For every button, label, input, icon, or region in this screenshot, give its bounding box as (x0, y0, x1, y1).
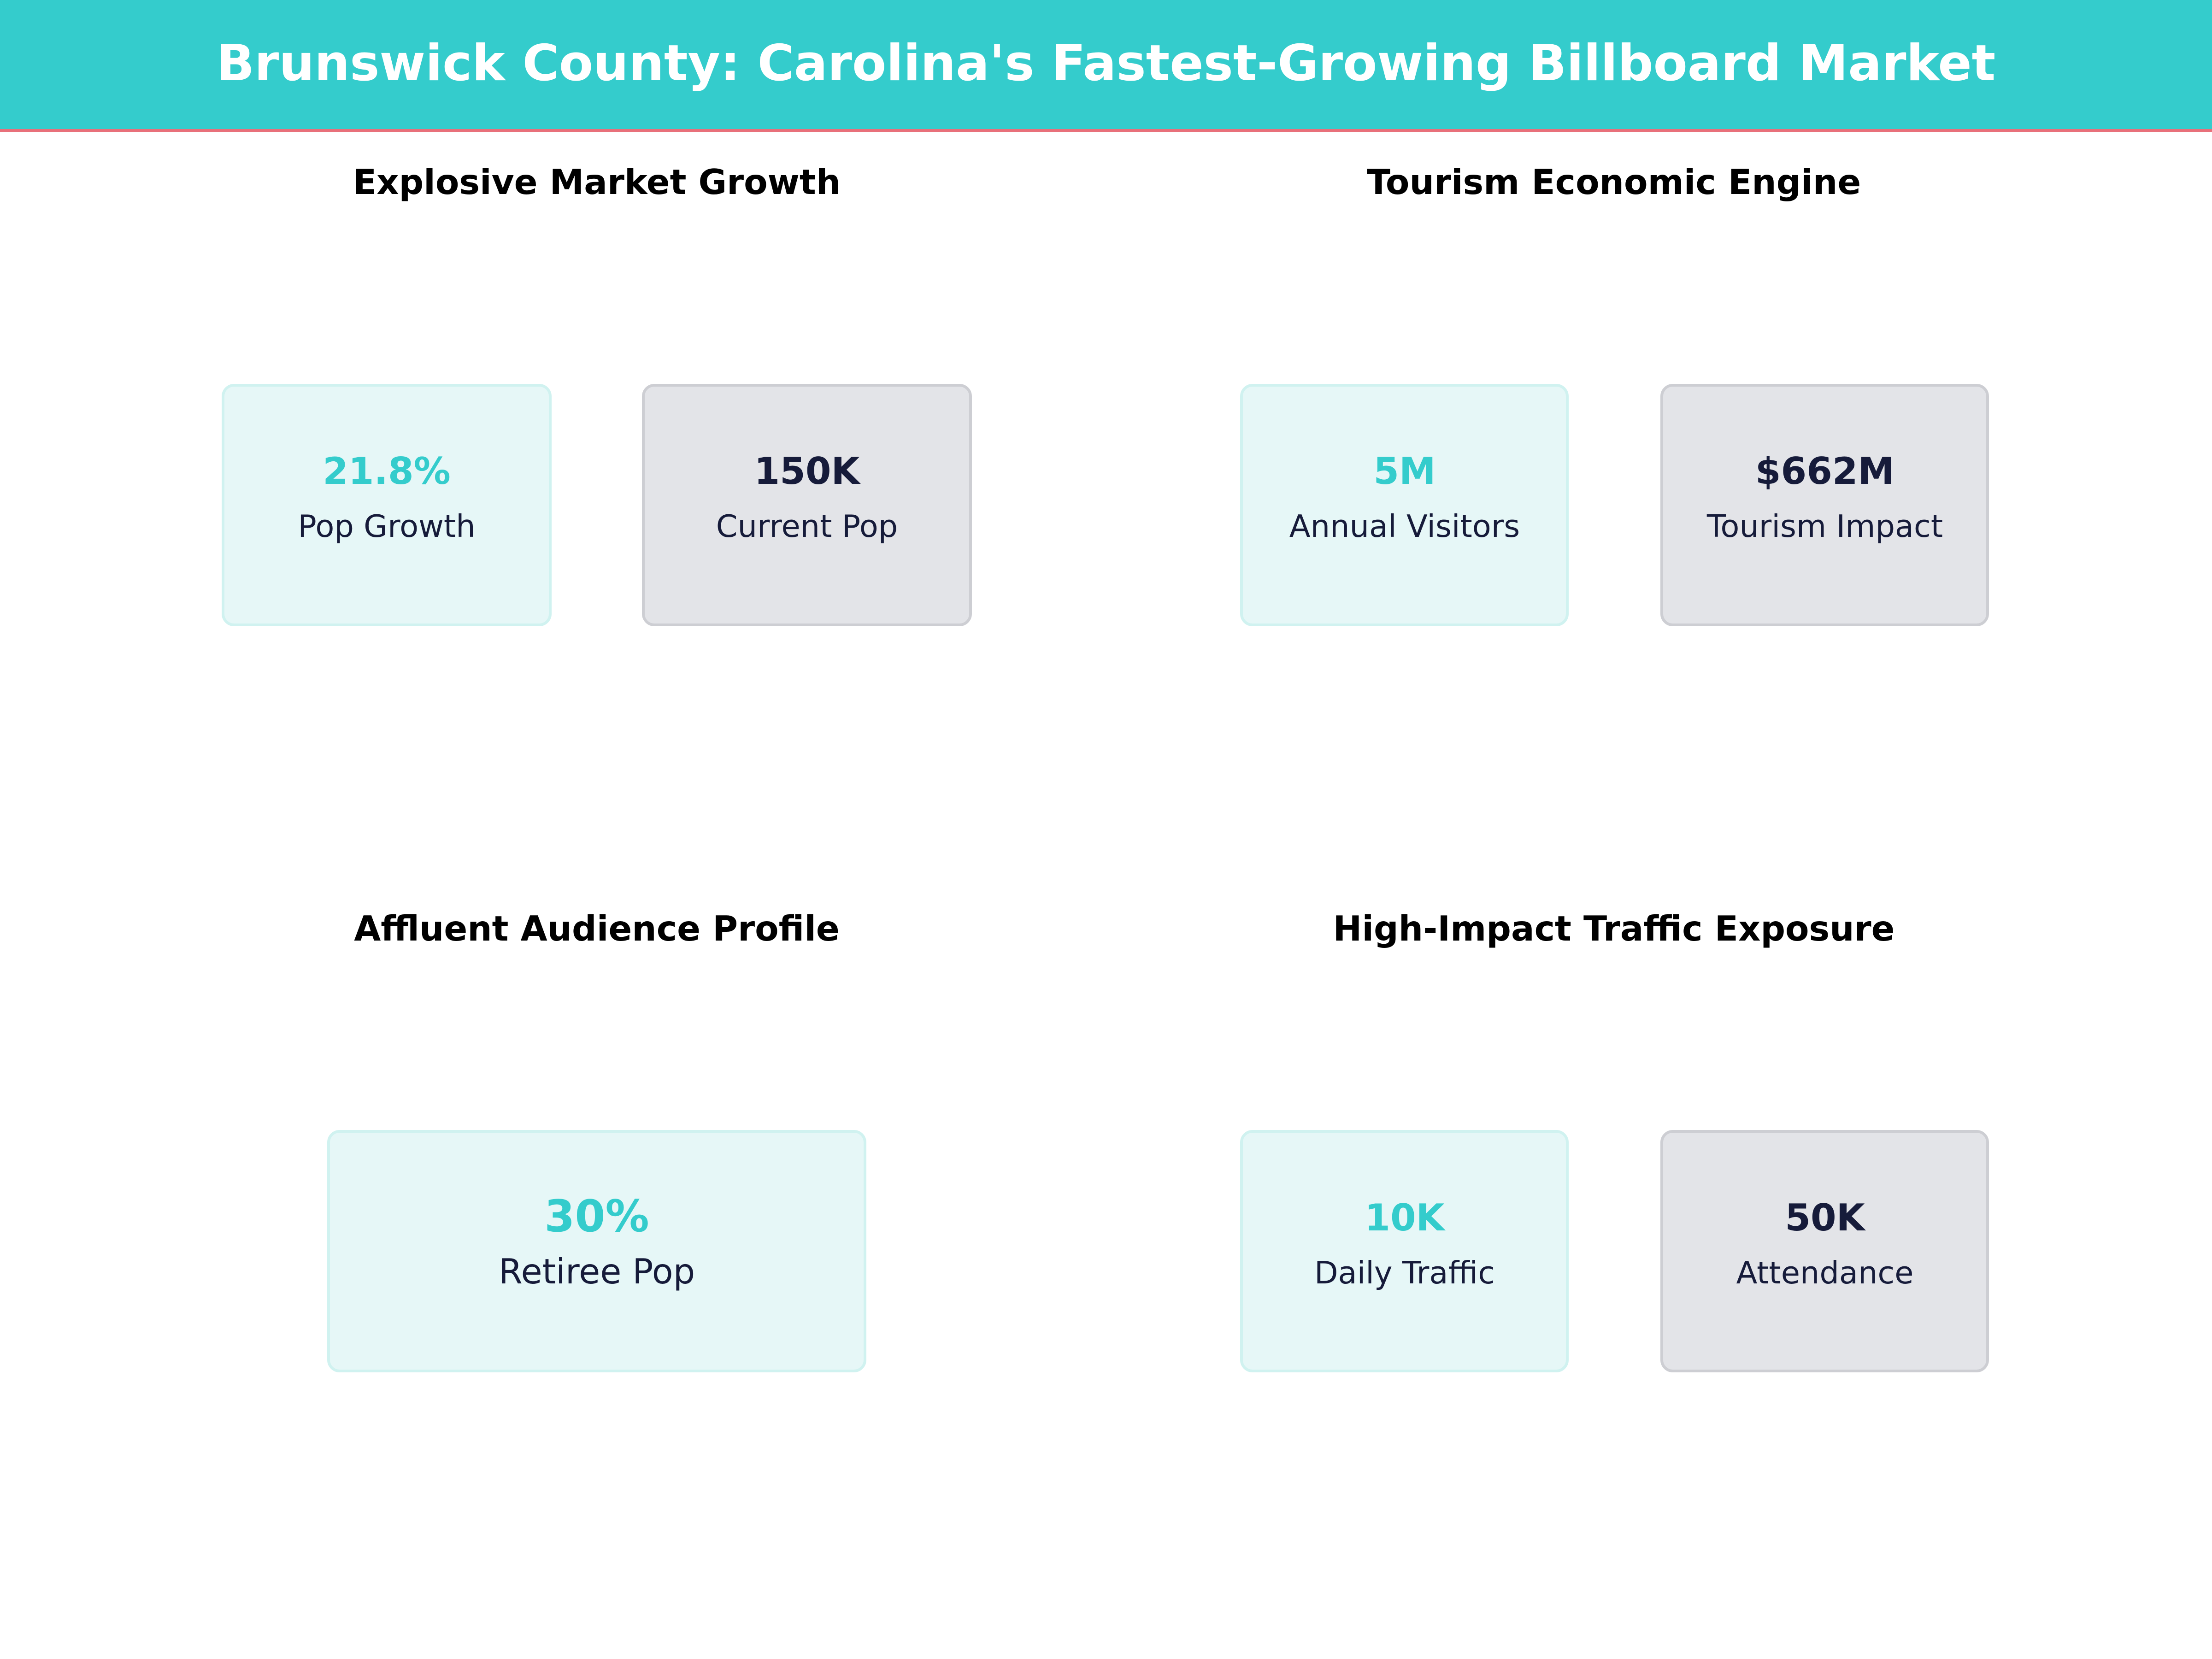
stat card: daily traffic: Daily Traffic (1314, 1255, 1495, 1291)
stat card: tourism impact: Tourism Impact (1706, 508, 1943, 544)
stat card: pop growth (223, 385, 550, 625)
stat card: tourism impact (1662, 385, 1988, 625)
panel: explosive market growth (223, 162, 971, 625)
stat card: retiree pop (329, 1131, 865, 1371)
stat card: annual visitors (1241, 385, 1567, 625)
stat card: annual visitors: 5M (1373, 450, 1436, 493)
header banner (0, 0, 2212, 132)
stat card: current pop: Current Pop (716, 508, 898, 544)
stat card: tourism impact: $662M (1755, 450, 1894, 493)
heading: Tourism Economic Engine (1367, 162, 1861, 202)
stat card: retiree pop: Retiree Pop (499, 1251, 695, 1292)
panel: tourism economic engine (1241, 162, 1988, 625)
stat card: daily traffic: 10K (1365, 1196, 1446, 1239)
heading: Explosive Market Growth (353, 162, 841, 202)
stat card: current pop: 150K (754, 450, 861, 493)
stat card: annual visitors: Annual Visitors (1289, 508, 1520, 544)
title: Brunswick County: Carolina's Fastest-Growing Billboard Market (217, 35, 1995, 92)
stat card: current pop (643, 385, 971, 625)
stat card: pop growth: Pop Growth (298, 508, 476, 544)
panel: affluent audience profile (329, 908, 865, 1371)
panel: high-impact traffic exposure (1241, 908, 1988, 1371)
stat card: attendance: 50K (1785, 1196, 1866, 1239)
stat card: pop growth: 21.8% (323, 450, 451, 493)
stat card: attendance: Attendance (1736, 1255, 1913, 1291)
stat card: attendance (1662, 1131, 1988, 1371)
heading: Affluent Audience Profile (354, 908, 840, 949)
heading: High-Impact Traffic Exposure (1333, 908, 1894, 949)
stat card: retiree pop: 30% (544, 1191, 649, 1242)
stat card: daily traffic (1241, 1131, 1567, 1371)
